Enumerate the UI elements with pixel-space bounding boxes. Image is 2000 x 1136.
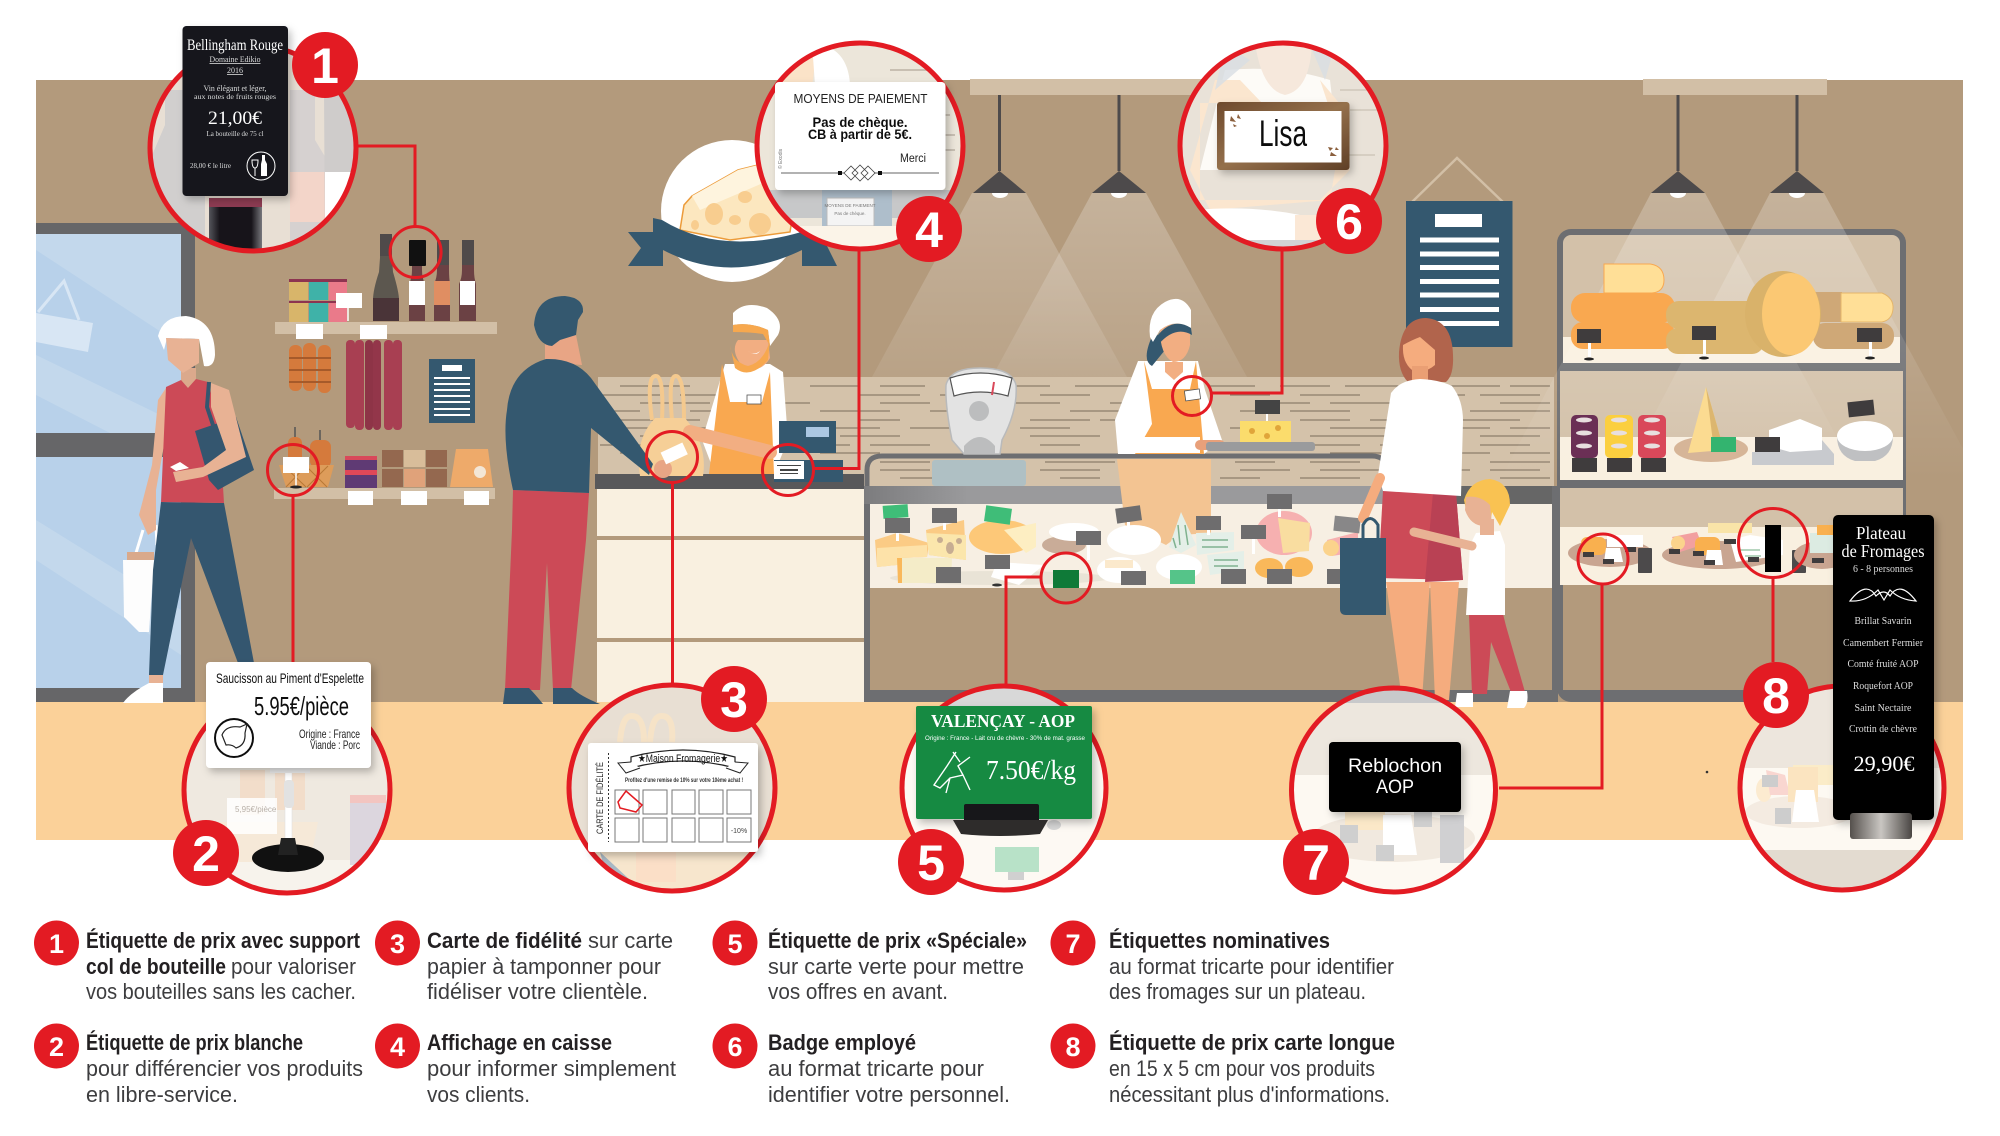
target circle 5 (1041, 553, 1091, 603)
tote bag (195, 417, 254, 490)
legend item 7: Étiquettes nominatives (1109, 928, 1330, 953)
legend item 5: Étiquette de prix «Spéciale» (768, 928, 1027, 953)
badge 4: 4 (915, 202, 943, 258)
badge 8: 8 (1762, 668, 1790, 724)
bottle-neck label: aux notes de fruits rouges (194, 92, 276, 101)
badge 8 (1743, 662, 1809, 728)
long black label: Camembert Fermier (1843, 637, 1923, 649)
jam jars (345, 456, 377, 488)
brick backsplash (598, 377, 1554, 486)
shopper: older woman (123, 316, 254, 703)
green label (916, 706, 1092, 819)
target circle 1 (390, 226, 441, 278)
legend item 3: sur carte (588, 928, 673, 953)
trousers (505, 490, 589, 690)
payment sign: Merci (900, 153, 926, 165)
platter 2 (1662, 523, 1806, 573)
stand (252, 760, 324, 872)
legend item 3: Carte de fidélité (427, 928, 582, 953)
shopper: woman with child (1340, 318, 1528, 708)
legend item 6: identifier votre personnel. (768, 1082, 1010, 1107)
arm (1363, 478, 1380, 518)
legend item 2: 2 (49, 1032, 64, 1062)
register counter (595, 474, 864, 702)
legend item 2: pour différencier vos produits (86, 1056, 363, 1081)
cheese medallion with ribbon (628, 140, 837, 282)
arm (690, 432, 770, 452)
legend item 8 (1050, 1024, 1395, 1107)
legend item 3: fidéliser votre clientèle. (427, 979, 648, 1004)
target circle 8 (1738, 508, 1808, 578)
white label: Saucisson au Piment d'Espelette (216, 670, 364, 686)
jars top shelf (289, 279, 362, 323)
floor (36, 702, 1963, 840)
top shelf board (275, 322, 497, 334)
bottle-neck label: 21,00€ (208, 108, 263, 129)
neck (181, 368, 196, 390)
apron (709, 364, 774, 474)
callout 4: checkout sign: MOYENS DE PAIEMENT (825, 203, 876, 208)
white label: 5.95€/pièce (254, 691, 349, 721)
long black label (1833, 515, 1934, 820)
legend item 2: en libre-service. (86, 1082, 238, 1107)
legend item 3 (375, 920, 673, 1004)
loyalty card (588, 743, 758, 852)
paper bag (450, 449, 493, 487)
legend item 8: nécessitant plus d'informations. (1109, 1082, 1390, 1107)
bottle-neck label: Vin élégant et léger, (204, 84, 266, 93)
legend item 2 (34, 1024, 363, 1107)
long black label: Saint Nectaire (1854, 702, 1912, 714)
child neck (1480, 519, 1494, 535)
legend item 4: vos clients. (427, 1082, 530, 1107)
callout 3: loyalty card (569, 666, 775, 892)
face (1403, 337, 1435, 371)
hand (654, 460, 672, 478)
connector 6 (1211, 251, 1282, 393)
green label: VALENÇAY - AOP (931, 711, 1075, 731)
black label (1329, 742, 1461, 812)
connector 2 (292, 496, 294, 665)
target circle 6 (1172, 376, 1212, 416)
right light cones (1536, 193, 1937, 418)
child arm (1414, 532, 1472, 546)
white label (206, 662, 371, 768)
target circle 3 (646, 432, 698, 482)
payment sign: CB à partir de 5€. (808, 126, 912, 142)
shirt (702, 364, 788, 474)
wine bottles (373, 234, 476, 321)
hair back (1399, 318, 1453, 382)
target circle 4 (762, 444, 814, 496)
legend item 6: Badge employé (768, 1030, 916, 1055)
long black label: de Fromages (1842, 541, 1924, 561)
right arm (173, 383, 246, 482)
legend (34, 920, 1395, 1107)
legend item 3: papier à tamponner pour (427, 954, 661, 979)
legend item 1: vos bouteilles sans les cacher. (86, 979, 356, 1004)
child shirt (1466, 531, 1505, 615)
callout 2: white price label: 5,95€/pièce (235, 805, 277, 814)
cash register (774, 421, 843, 482)
target circle 2 (268, 444, 318, 496)
central cheese counter (864, 299, 1558, 702)
legend item 3: 3 (390, 929, 405, 959)
shopper: man in navy sweater (503, 296, 688, 704)
skirt (1378, 491, 1463, 580)
hanging salamis (346, 340, 402, 430)
shirt (1378, 379, 1463, 496)
callout 2: white price label (173, 662, 390, 900)
bottle-neck label: Bellingham Rouge (187, 37, 283, 54)
child head (1464, 479, 1510, 526)
legend item 7: 7 (1065, 929, 1081, 959)
badge 5: 5 (917, 835, 945, 891)
badge 1: 1 (311, 38, 339, 94)
loyalty card: -10% (731, 828, 747, 835)
small white label on stand (283, 457, 309, 488)
legend item 5 (712, 920, 1027, 1004)
payment sign: Pas de chèque. (812, 114, 908, 130)
child shoes (1455, 691, 1528, 708)
legend item 6 (712, 1024, 1010, 1107)
tote bag (1340, 518, 1386, 615)
long black label: Roquefort AOP (1853, 680, 1913, 692)
top shelf cheeses (1571, 264, 1894, 357)
weighing scale (932, 368, 1026, 486)
bottle-neck label: La bouteille de 75 cl (206, 129, 264, 138)
loyalty card: Profitez d'une remise de 10% sur votre 10ème achat ! (625, 777, 743, 784)
connector lines and target circles (268, 146, 1808, 788)
lower shelf board (274, 488, 495, 499)
window (36, 223, 195, 702)
callout 4: checkout sign: Pas de chèque. (834, 211, 866, 216)
mini bottle label (409, 240, 426, 266)
small floor speck (1706, 771, 1708, 773)
legend item 6: 6 (727, 1032, 743, 1062)
name plate (1217, 102, 1350, 170)
badge 2 (173, 820, 239, 886)
legend item 7 (1050, 920, 1394, 1004)
connector 4 (814, 251, 859, 468)
badge 2: 2 (192, 826, 220, 882)
legend item 1 (34, 920, 361, 1004)
legend item 1: Étiquette de prix avec support (86, 928, 361, 953)
callout 4: checkout sign (757, 43, 963, 262)
connector 8 (1772, 578, 1774, 662)
child pants (1469, 614, 1525, 694)
badge 7: 7 (1302, 835, 1330, 891)
long black label: 6 - 8 personnes (1853, 564, 1913, 575)
long black label: Plateau (1856, 523, 1906, 543)
hair (158, 316, 215, 366)
legend item 5: 5 (727, 929, 743, 959)
torso (161, 379, 224, 503)
lower shelf tags (348, 491, 489, 505)
legend item 4: pour informer simplement (427, 1056, 676, 1081)
wall menu board (1406, 158, 1512, 347)
face (166, 338, 199, 373)
neck (1412, 366, 1428, 388)
shelf price tags (296, 324, 387, 339)
legend item 8: Étiquette de prix carte longue (1109, 1030, 1395, 1055)
bottle-neck label (182, 26, 288, 196)
shoes (503, 688, 600, 704)
connector 5 (1006, 577, 1042, 684)
badge 4 (896, 196, 962, 262)
legend item 5: vos offres en avant. (768, 979, 948, 1004)
sweater (505, 359, 653, 493)
long black label: Comté fruité AOP (1848, 658, 1918, 670)
ceiling lamps (970, 79, 1827, 198)
small navy board (429, 359, 475, 423)
long black label: 29,90€ (1854, 751, 1914, 776)
platter 3 (1794, 525, 1850, 569)
hanging sausages (289, 343, 331, 393)
cone cheese on plate (1674, 387, 1748, 462)
legend item 8: 8 (1065, 1032, 1081, 1062)
callout 1: wine bottle label (148, 26, 360, 257)
target circle 7 (1578, 534, 1628, 584)
connector 7 (1499, 584, 1602, 788)
payment sign: © Exodis (777, 148, 784, 169)
wall light cones (872, 193, 1247, 377)
middle shelf jars (1571, 415, 1666, 472)
badge 5 (898, 829, 964, 895)
badge 3: 3 (720, 672, 748, 728)
black label: AOP (1376, 777, 1414, 798)
top shelf tags (1577, 326, 1882, 360)
head (735, 340, 770, 369)
loyalty card: ★Maison Fromagerie★ (638, 753, 728, 765)
legend item 6: au format tricarte pour (768, 1056, 984, 1081)
bottle-neck label: Domaine Edikio (210, 55, 260, 64)
left arm (139, 388, 166, 535)
cheeses in display (875, 511, 1358, 585)
paper bag (639, 376, 704, 476)
payment sign: MOYENS DE PAIEMENT (794, 91, 928, 106)
green label: 7.50€/kg (986, 755, 1076, 785)
left wall shelves with products (274, 234, 497, 505)
neck (545, 330, 582, 365)
badge 6: 6 (1335, 194, 1363, 250)
phone card (170, 462, 189, 471)
legs (149, 502, 254, 675)
legend item 4: Affichage en caisse (427, 1030, 612, 1055)
legend item 1: 1 (49, 929, 64, 959)
legs (1386, 582, 1459, 700)
wall (36, 80, 1963, 702)
white label: Origine : France (299, 727, 360, 741)
badge (747, 395, 761, 404)
bottle-neck label: 28,00 € le litre (190, 162, 231, 170)
legend item 7: des fromages sur un plateau. (1109, 979, 1366, 1004)
payment sign (775, 82, 946, 190)
assistant: woman (1115, 299, 1315, 545)
callout 8: long price card (1740, 515, 1944, 895)
shop assistant: man (639, 305, 788, 476)
legend item 2: Étiquette de prix blanche (86, 1030, 303, 1055)
badge 6 (1316, 188, 1382, 254)
callout 7: cheese platter label (1283, 688, 1496, 895)
bottom shelf platters (1568, 523, 1850, 573)
loyalty card: CARTE DE FIDÉLITÉ (595, 762, 605, 834)
blue cheese tray (1752, 419, 1834, 465)
legend item 1: pour valoriser (231, 954, 356, 979)
legend item 5: sur carte verte pour mettre (768, 954, 1024, 979)
platter 1 (1568, 535, 1652, 573)
basket with sausages (279, 427, 334, 487)
mini long label in target circle (1765, 525, 1781, 572)
right refrigerated shelves (1536, 193, 1937, 702)
callout 5: green special price label (898, 686, 1106, 895)
bottle-neck label: 2016 (227, 66, 243, 75)
callout 6: employee badge (1180, 43, 1386, 254)
name plate: Lisa (1259, 113, 1307, 154)
green label: Origine : France - Lait cru de chèvre - 30% de mat. grasse (925, 735, 1085, 742)
steel base (1850, 813, 1912, 839)
brown jars (382, 450, 447, 487)
legend item 4: 4 (390, 1032, 405, 1062)
black holder (953, 804, 1048, 836)
white bowl (1837, 400, 1893, 461)
long black label: Crottin de chèvre (1849, 723, 1917, 735)
connector 1 (358, 146, 415, 226)
legend item 1: col de bouteille (86, 954, 226, 979)
badge 7 (1283, 829, 1349, 895)
badge 3 (701, 666, 767, 732)
shopping bag (123, 525, 157, 632)
connector 3 (671, 483, 674, 684)
display price tags (883, 494, 1361, 588)
shop scene background (36, 80, 1963, 840)
black label: Reblochon (1348, 756, 1442, 777)
badge 1 (292, 32, 358, 98)
legend item 7: au format tricarte pour identifier (1109, 954, 1394, 979)
long black label: Brillat Savarin (1854, 615, 1912, 627)
legend item 8: en 15 x 5 cm pour vos produits (1109, 1056, 1375, 1081)
hair (534, 296, 583, 346)
legend item 4 (375, 1024, 676, 1107)
white label: Viande : Porc (310, 738, 360, 752)
